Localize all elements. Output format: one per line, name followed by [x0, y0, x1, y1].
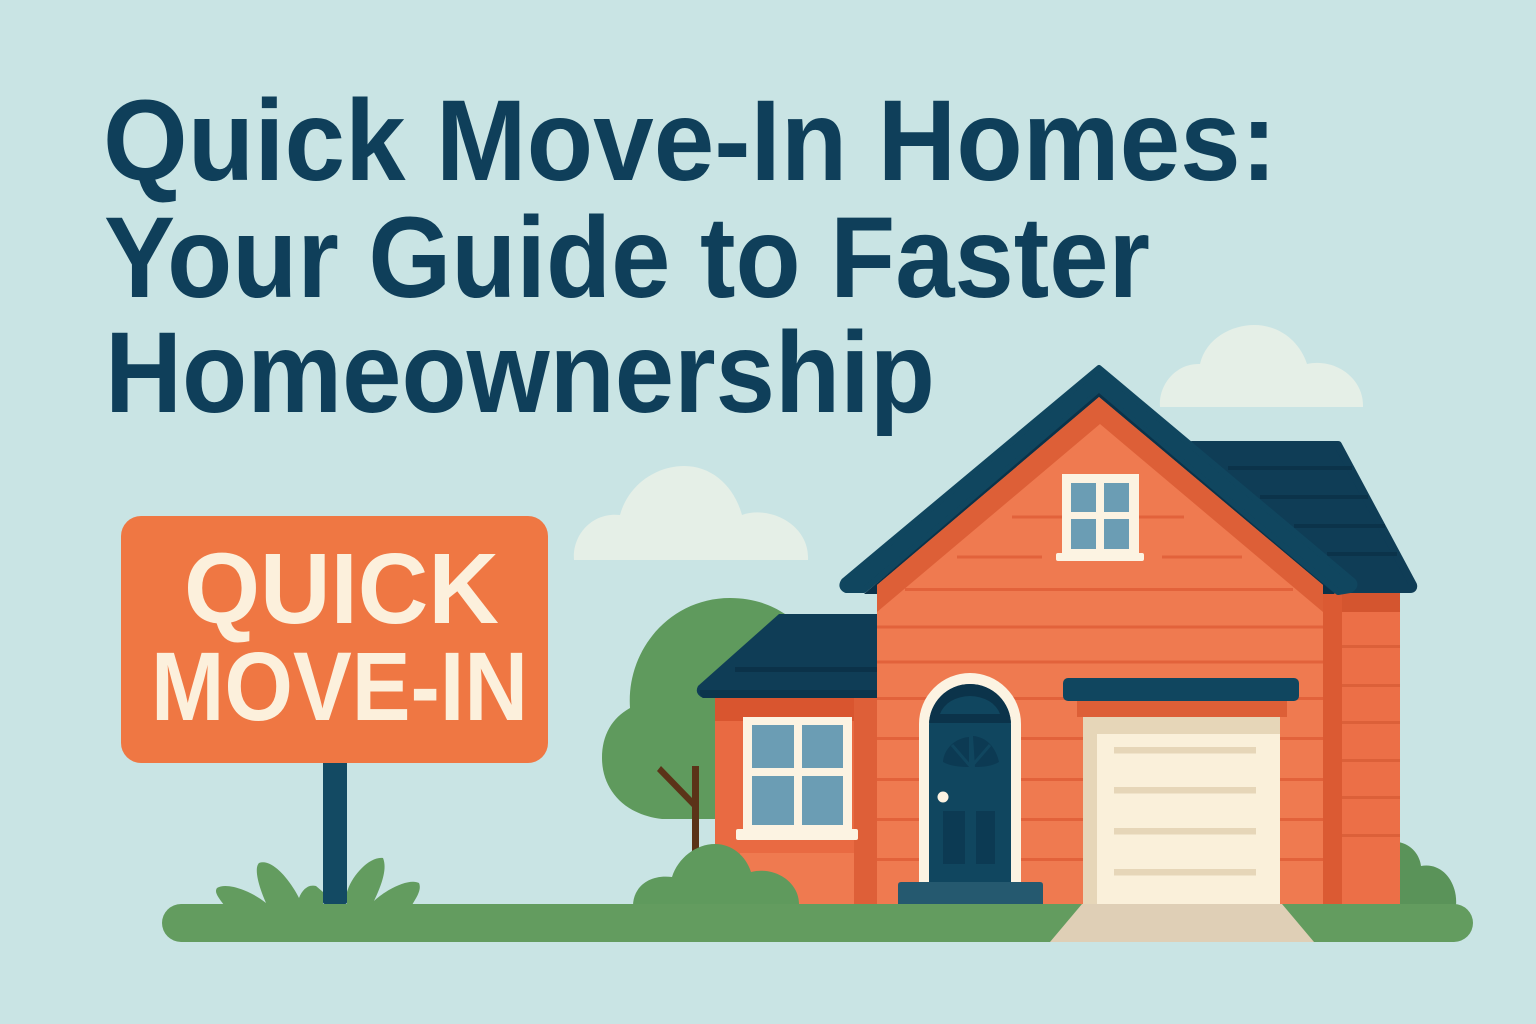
left wing wall: [715, 695, 877, 904]
tree: [602, 598, 785, 852]
cloud: centre: [574, 466, 808, 560]
left wing window: [736, 717, 858, 840]
front step: [898, 882, 1043, 904]
front door: [919, 673, 1021, 884]
main gable wall: [877, 397, 1323, 904]
sign board: [121, 516, 548, 763]
cloud: upper right: [1160, 325, 1363, 407]
title: Homeownership: [105, 309, 935, 437]
tree trunk: [657, 766, 699, 852]
title: Your Guide to Faster: [104, 194, 1150, 322]
title: Quick Move-In Homes:: [103, 77, 1277, 205]
side wall: [1323, 590, 1400, 904]
front bush: [633, 844, 799, 906]
sign text: QUICK: [184, 533, 499, 645]
grass tuft at sign post: [216, 858, 420, 905]
title: [103, 77, 1277, 437]
driveway path: [1050, 904, 1314, 942]
sign post: [323, 760, 347, 904]
garage: [1063, 678, 1299, 904]
right bush: [1398, 842, 1456, 906]
attic window: [1056, 474, 1144, 561]
main roof rafters: [842, 368, 1354, 594]
lawn: [162, 904, 1473, 942]
house: [697, 368, 1413, 904]
rear roof: [1192, 445, 1413, 589]
sign text: MOVE-IN: [151, 632, 528, 741]
sign text: [151, 533, 528, 741]
left wing roof: [697, 614, 877, 698]
sign: [121, 516, 548, 904]
tree canopy: [602, 598, 785, 819]
